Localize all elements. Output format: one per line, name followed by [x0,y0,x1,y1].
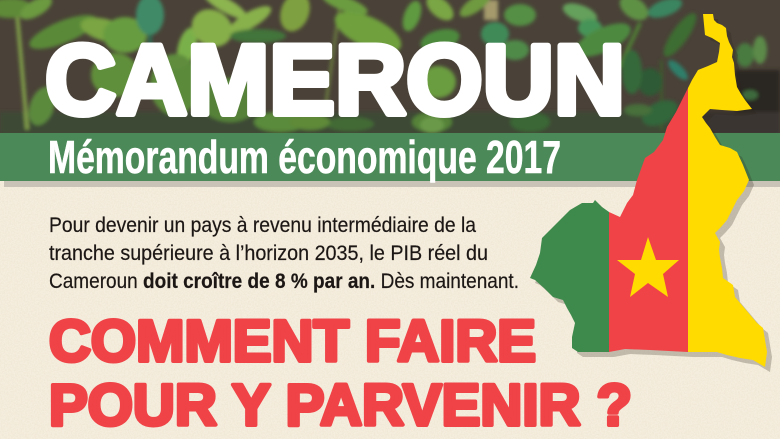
map shadow [535,19,772,372]
map of Cameroon in flag colours [530,14,772,372]
subtitle: Mémorandum économique 2017: Mémorandum économique 2017 [48,131,561,183]
headline: comment faire pour y parvenir: COMMENT FAIRE [49,309,536,374]
green banner [0,133,780,187]
title: CAMEROUN: CAMEROUN [45,24,625,135]
paper background [0,181,780,439]
flag stripes [530,14,767,367]
intro paragraph: tranche supérieure à l’horizon 2035, le PIB réel du [49,241,488,265]
photo of green plants [0,0,780,134]
intro paragraph: Cameroun doit croître de 8 % par an. Dès maintenant. [49,269,519,293]
headline: comment faire pour y parvenir [49,309,632,438]
headline: comment faire pour y parvenir: POUR Y PARVENIR ? [49,373,632,438]
intro paragraph [49,213,519,293]
flag star [617,237,679,297]
intro paragraph: Pour devenir un pays à revenu intermédiaire de la [49,213,476,237]
